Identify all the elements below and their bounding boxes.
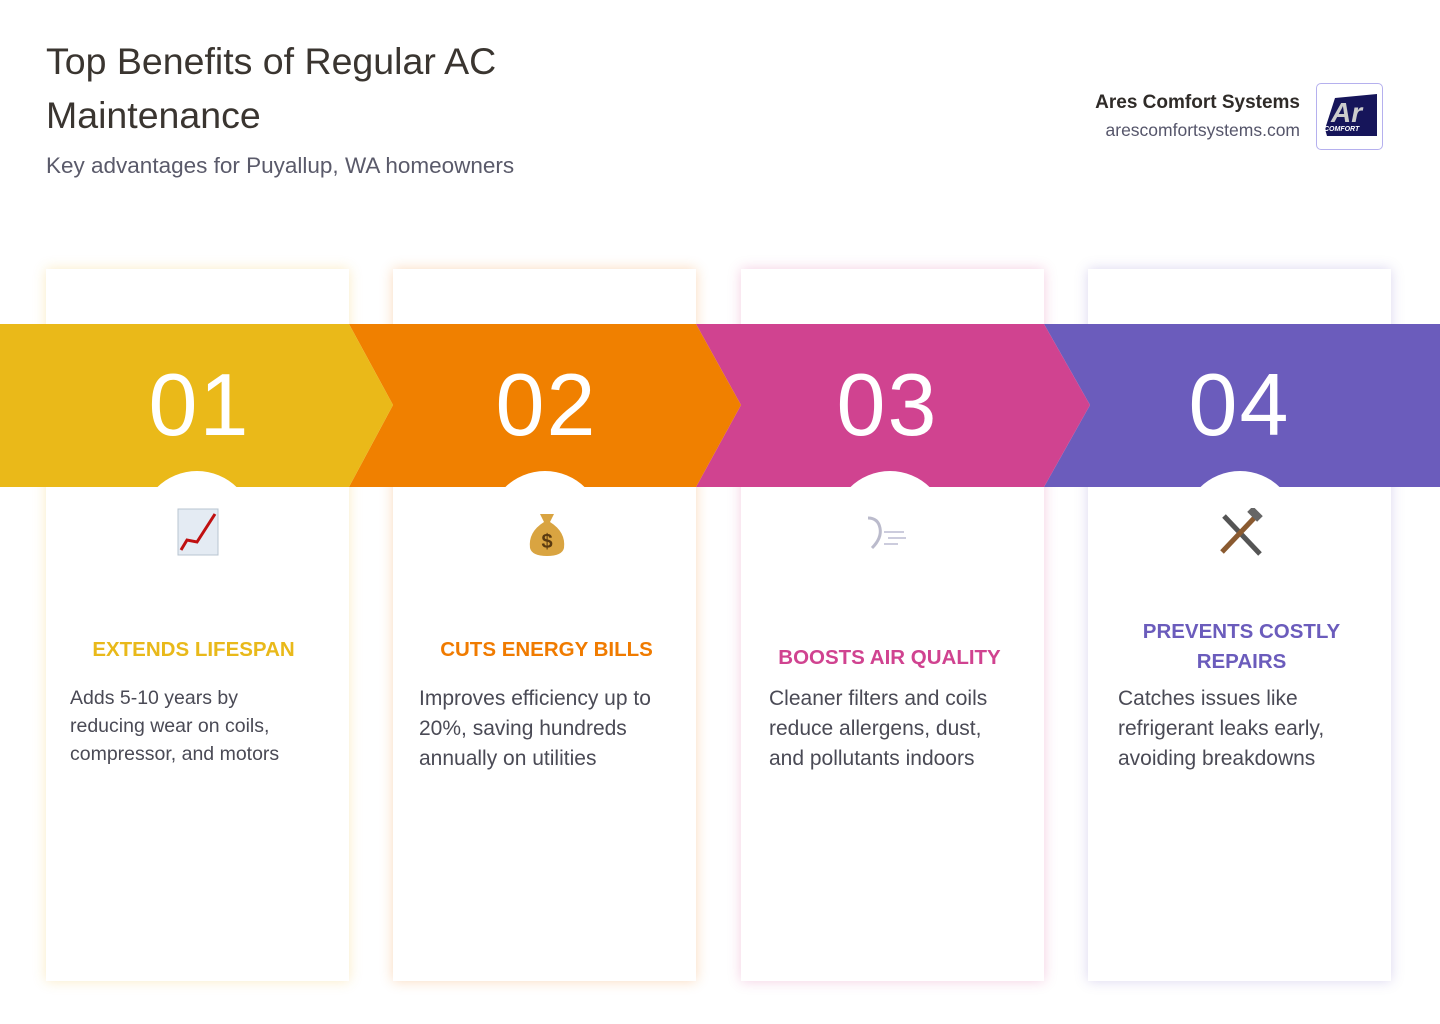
text 2: 20%, saving hundreds <box>419 717 627 740</box>
heading 4: PREVENTS COSTLY <box>1143 620 1340 643</box>
heading 4: REPAIRS <box>1197 650 1286 673</box>
brand text <box>1095 92 1300 140</box>
brand text: arescomfortsystems.com <box>1106 120 1300 140</box>
numbers: 01 <box>149 355 250 454</box>
icon: money bag <box>530 514 564 556</box>
text 3: reduce allergens, dust, <box>769 717 981 740</box>
text 1: Adds 5-10 years by <box>70 687 238 709</box>
text: 04 <box>1189 355 1290 454</box>
text 4: avoiding breakdowns <box>1118 747 1315 770</box>
logo: Ar <box>1330 97 1364 128</box>
text 1: reducing wear on coils, <box>70 715 269 737</box>
icon: tools <box>1220 508 1263 556</box>
text: 02 <box>496 355 597 454</box>
text 1 <box>70 687 279 765</box>
chevron band <box>0 324 1440 487</box>
card 3 <box>741 269 1044 981</box>
brand text: Ares Comfort Systems <box>1095 92 1300 113</box>
text 2: annually on utilities <box>419 747 596 770</box>
text: 03 <box>837 355 938 454</box>
icon: wind <box>868 516 906 549</box>
heading 3: BOOSTS AIR QUALITY <box>778 646 1001 669</box>
text 2: Improves efficiency up to <box>419 687 651 710</box>
text 4 <box>1118 687 1324 770</box>
card 2 <box>393 269 696 981</box>
card 4 <box>1088 269 1391 981</box>
icon circles <box>140 471 254 585</box>
text 3: Cleaner filters and coils <box>769 687 987 710</box>
title: Top Benefits of Regular AC <box>46 40 496 82</box>
heading 2: CUTS ENERGY BILLS <box>440 638 653 661</box>
icon: chart <box>178 508 218 556</box>
text 4: refrigerant leaks early, <box>1118 717 1324 740</box>
title <box>46 40 496 136</box>
logo: COMFORT <box>1324 126 1360 133</box>
text 4: Catches issues like <box>1118 687 1298 710</box>
text 3 <box>769 687 987 770</box>
heading 1: EXTENDS LIFESPAN <box>92 638 295 661</box>
subtitle: Key advantages for Puyallup, WA homeowners <box>46 153 514 178</box>
text 3: and pollutants indoors <box>769 747 974 770</box>
card 1 <box>46 269 349 981</box>
heading 4 <box>1143 620 1340 673</box>
logo <box>1316 83 1383 150</box>
icon: money bag: $ <box>541 531 553 553</box>
text 1: compressor, and motors <box>70 743 279 765</box>
title: Maintenance <box>46 94 261 136</box>
text 2 <box>419 687 651 770</box>
